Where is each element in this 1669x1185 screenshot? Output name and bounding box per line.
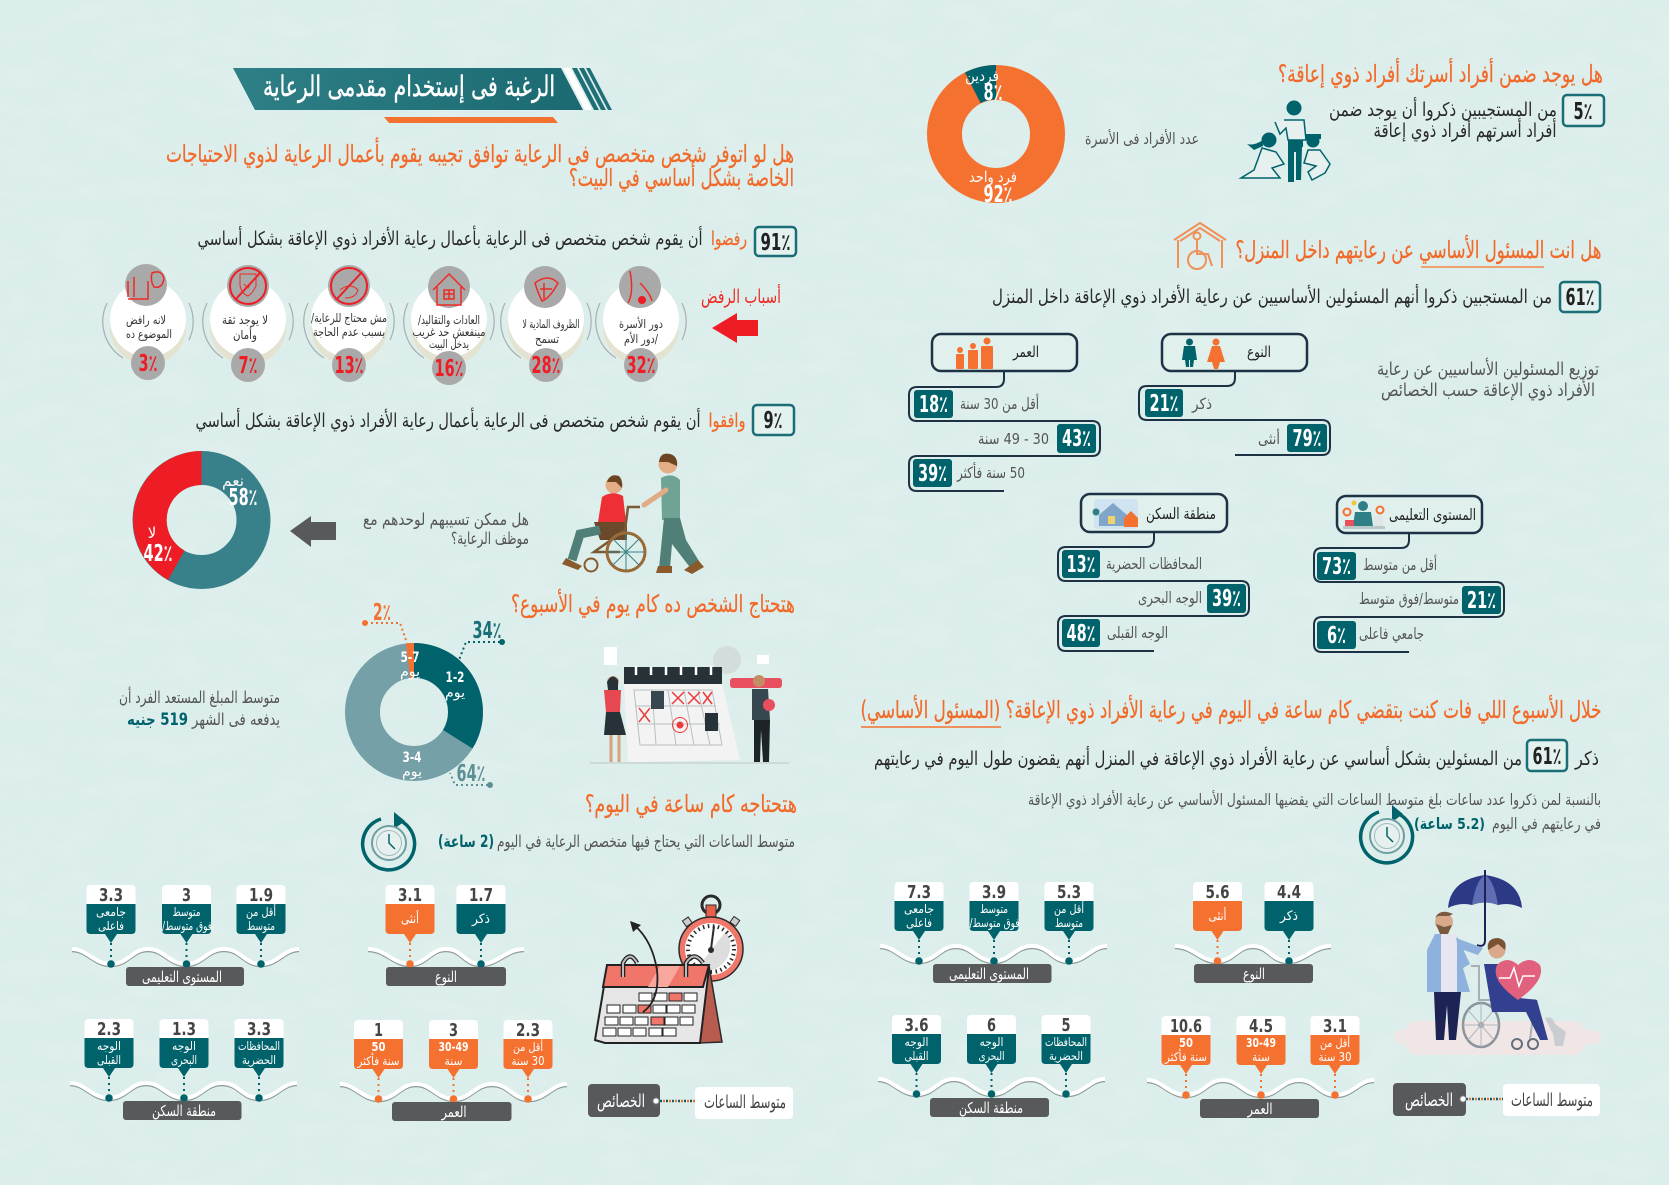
chart: age hours left: سنة فأكثر — [357, 1052, 400, 1069]
donut chart: family members — [944, 65, 1048, 208]
breakdown: region: 48٪ — [1066, 621, 1096, 647]
stat: 61 percent: 61٪ — [1566, 285, 1594, 311]
text: average hours needed: متوسط الساعات التي يحتاج فيها متخصص الرعاية في اليوم — [497, 832, 795, 852]
chart: gender hours right: ذكر — [1279, 909, 1298, 924]
chart: age hours left: 30-49 — [438, 1040, 468, 1054]
reason 3 percent: لانه رافض — [126, 313, 166, 328]
chart: education hours left: متوسط — [247, 919, 275, 934]
text: monthly amount: يدفعه فى الشهر — [191, 710, 280, 730]
question heading — [166, 137, 794, 192]
illustration: carer with umbrella and wheelchair — [1394, 870, 1601, 1055]
chart: age hours right: العمر — [1247, 1100, 1272, 1118]
breakdown: education: متوسط/فوق متوسط — [1359, 590, 1459, 608]
chart: region hours left: 2.3 — [97, 1019, 121, 1040]
reason 7 percent — [203, 265, 293, 382]
chart: education hours right: متوسط — [1055, 916, 1083, 931]
heading: hours per day: هتحتاجه كام ساعة في اليوم؟ — [585, 790, 797, 818]
breakdown: region: 39٪ — [1212, 586, 1241, 612]
text: can they be left alone — [363, 510, 529, 549]
text: average hours needed — [438, 832, 795, 852]
text: average hours primary carer — [1028, 790, 1601, 834]
chart: age hours right: سنة فأكثر — [1164, 1048, 1207, 1065]
chart: region hours right: منطقة السكن — [959, 1099, 1023, 1117]
label: family size: عدد الأفراد فى الأسرة — [1085, 129, 1199, 148]
chart: region hours left: منطقة السكن — [152, 1102, 216, 1120]
arrow: red — [712, 313, 758, 343]
chart: region hours left: البحرى — [171, 1053, 197, 1068]
donut chart: family members: 8٪ — [984, 80, 1002, 106]
stat: refused 91 percent: 91٪ — [760, 230, 790, 256]
reason 16 percent: يدخل البيت — [429, 337, 469, 351]
chart: age hours left: 3 — [449, 1020, 458, 1041]
donut chart: days: 1-2 — [446, 670, 464, 686]
reason 16 percent: العادات والتقاليد/ — [418, 313, 480, 328]
breakdown: education — [1314, 496, 1504, 652]
arrow: gray — [290, 516, 336, 547]
donut chart: yes no: لا — [148, 524, 156, 542]
reason 13 percent: 13٪ — [334, 353, 364, 379]
donut chart: days: يوم — [400, 664, 420, 680]
illustration: man pushing wheelchair — [562, 454, 704, 574]
icon: age figures — [956, 338, 993, 369]
chart: region hours right: 3.6 — [904, 1015, 928, 1036]
chart: education hours right: جامعى — [904, 902, 934, 916]
chart: education hours left: متوسط — [172, 905, 200, 920]
chart: region hours left: الوجه — [172, 1039, 196, 1054]
chart: region hours right: المحافظات — [1045, 1035, 1087, 1049]
chart: education hours right: متوسط — [980, 902, 1008, 917]
chart: age hours left: 30 سنة — [512, 1054, 544, 1068]
breakdown: region — [1058, 494, 1249, 651]
icon: houses — [1092, 499, 1138, 529]
reason 28 percent: تسمح — [535, 332, 559, 346]
breakdown: region: الوجه البحرى — [1138, 589, 1202, 607]
chart: region hours left: 1.3 — [172, 1019, 196, 1040]
chart: education hours left: 3 — [182, 885, 191, 906]
title banner: الرغبة فى إستخدام مقدمى الرعاية — [263, 70, 555, 103]
chart: gender hours right — [1175, 882, 1331, 983]
breakdown: region: 13٪ — [1066, 552, 1096, 578]
chart: region hours left: 3.3 — [247, 1019, 271, 1040]
stat: 5 percent — [1329, 95, 1604, 143]
illustration: calendar with people — [590, 646, 789, 763]
chart: age hours right — [1147, 1016, 1374, 1118]
chart: age hours left: 2.3 — [516, 1020, 540, 1041]
chart: education hours left: جامعى — [96, 905, 126, 919]
donut chart: yes no: نعم — [222, 472, 244, 490]
chart: age hours right: 50 — [1179, 1036, 1193, 1050]
chart: education hours left: 3.3 — [99, 885, 123, 906]
donut chart: days: 5-7 — [400, 650, 420, 666]
donut chart: days — [362, 643, 483, 780]
heading: days per week: هتحتاج الشخص ده كام يوم في الأسبوع؟ — [511, 589, 795, 618]
chart: education hours right: فوق متوسط/ — [970, 916, 1020, 931]
breakdown: education: جامعي فاعلى — [1359, 625, 1424, 644]
breakdown: gender — [1139, 334, 1330, 455]
chart: education hours right: 5.3 — [1057, 882, 1081, 903]
reason 32 percent — [596, 266, 686, 382]
icon: clock — [1361, 805, 1413, 863]
donut chart: days: يوم — [445, 685, 465, 701]
chart: region hours left — [70, 1019, 297, 1120]
breakdown: age: العمر — [1012, 343, 1039, 361]
reason 7 percent: لا يوجد ثقة — [222, 313, 268, 328]
breakdown: region: الوجه القبلى — [1107, 624, 1168, 642]
reason 32 percent: دور الأسرة — [619, 316, 663, 332]
label: reasons for refusal: أسباب الرفض — [701, 284, 781, 308]
chart: education hours right: 7.3 — [907, 882, 931, 903]
chart: region hours left: الوجه — [97, 1039, 121, 1054]
chart: region hours left: الحضرية — [242, 1053, 276, 1068]
text: monthly amount — [119, 686, 280, 730]
reason 3 percent — [103, 264, 193, 380]
chart: age hours right: 30-49 — [1246, 1036, 1276, 1050]
breakdown: region: منطقة السكن — [1146, 505, 1216, 523]
reason 28 percent: الظروف المادية لا — [522, 317, 580, 332]
breakdown: age — [909, 334, 1100, 491]
chart: education hours right: أقل من — [1054, 901, 1084, 917]
breakdown: gender: ذكر — [1191, 395, 1212, 413]
chart: age hours right: 30 سنة — [1318, 1050, 1352, 1064]
breakdown: age: 18٪ — [919, 392, 948, 418]
stat: refused 91 percent: رفضوا — [711, 228, 747, 250]
breakdown: age: 50 سنة فأكثر — [956, 462, 1025, 482]
legend right: الخصائص — [1405, 1090, 1453, 1111]
chart: gender hours left: 3.1 — [398, 885, 422, 906]
reason 13 percent: مش محتاج للرعاية/ — [311, 311, 387, 326]
decorative orange bar under title — [384, 117, 558, 123]
chart: region hours right: البحرى — [978, 1049, 1004, 1064]
icon: graduate with books — [1343, 500, 1385, 529]
reason 7 percent: 7٪ — [238, 353, 258, 379]
chart: education hours left: المستوى التعليمى — [142, 968, 222, 986]
reason 32 percent: /دور الأم — [624, 331, 659, 347]
reason 28 percent — [501, 266, 591, 382]
icon: home wheelchair — [1174, 223, 1226, 269]
chart: age hours left: 50 — [372, 1040, 386, 1054]
stat: agreed 9 percent: أن يقوم شخص متخصص فى الرعاية بأعمال رعاية الأفراد ذوي الإعاقة بشكل أساسي — [196, 407, 700, 432]
chart: age hours right: سنة — [1252, 1050, 1270, 1064]
breakdown: gender: 21٪ — [1150, 391, 1178, 417]
chart: age hours left — [340, 1020, 567, 1121]
donut chart: yes no: 42٪ — [144, 541, 172, 567]
chart: region hours right: الحضرية — [1049, 1049, 1083, 1064]
stat: 5 percent: 5٪ — [1574, 99, 1592, 125]
callout 2 percent: 2٪ — [373, 600, 391, 626]
breakdown: education: المستوى التعليمى — [1389, 506, 1476, 524]
callout 34 percent: 34٪ — [472, 618, 502, 644]
question heading: الخاصة بشكل أساسي في البيت؟ — [569, 162, 794, 192]
breakdown: education: أقل من متوسط — [1363, 554, 1437, 574]
reason 13 percent: بسبب عدم الحاجة — [313, 325, 385, 339]
chart: age hours left: 1 — [374, 1020, 383, 1041]
callout 64 percent — [450, 761, 493, 788]
stat: 5 percent: أفراد أسرتهم أفراد ذوي إعاقة — [1374, 118, 1556, 143]
breakdown: age: 43٪ — [1062, 426, 1091, 452]
title banner — [233, 68, 612, 110]
donut chart: family members: 92٪ — [984, 182, 1012, 208]
reason 7 percent: وأمان — [233, 327, 257, 343]
chart: age hours left: سنة — [444, 1054, 462, 1068]
callout 2 percent — [362, 600, 407, 643]
text: average hours needed: (2 ساعة) — [438, 832, 494, 851]
chart: education hours right: المستوى التعليمى — [949, 965, 1029, 983]
chart: age hours left: أقل من — [513, 1039, 543, 1055]
illustration: calendar and stopwatch — [595, 896, 743, 1043]
text: distribution: توزيع المسئولين الأساسيين عن رعاية — [1377, 358, 1599, 380]
chart: region hours right: الوجه — [980, 1035, 1004, 1050]
text: monthly amount: 519 جنيه — [127, 710, 188, 729]
chart: region hours right — [878, 1015, 1105, 1117]
donut chart: yes no — [133, 451, 258, 580]
chart: education hours right: فاعلى — [906, 916, 932, 930]
chart: age hours right: 3.1 — [1323, 1016, 1347, 1037]
stat: 61 percent — [992, 282, 1600, 312]
reason 16 percent — [404, 266, 494, 385]
illustration: children — [1241, 100, 1330, 182]
chart: education hours right — [880, 882, 1107, 983]
reason 28 percent: 28٪ — [532, 353, 560, 379]
chart: age hours right: 10.6 — [1170, 1016, 1202, 1037]
text: can they be left alone: هل ممكن تسيبهم لوحدهم مع — [363, 510, 529, 530]
reason 16 percent: مينفعش حد غريب — [412, 325, 486, 340]
chart: age hours right: أقل من — [1320, 1035, 1350, 1051]
text: average hours primary carer: في رعايتهم في اليوم — [1492, 815, 1601, 834]
stat: 61 percent all day: 61٪ — [1532, 744, 1562, 770]
legend right — [1393, 1083, 1600, 1116]
stat: refused 91 percent: أن يقوم شخص متخصص فى الرعاية بأعمال رعاية الأفراد ذوي الإعاقة بشكل أساسي — [198, 225, 702, 250]
legend left: الخصائص — [597, 1091, 645, 1112]
chart: gender hours left: 1.7 — [469, 885, 493, 906]
icon: man and woman — [1182, 338, 1225, 369]
chart: region hours left: المحافظات — [238, 1039, 280, 1053]
chart: region hours right: القبلى — [904, 1049, 928, 1063]
text: distribution — [1377, 358, 1599, 401]
reason 32 percent: 32٪ — [626, 353, 656, 379]
question heading: هل لو اتوفر شخص متخصص فى الرعاية توافق تجيبه يقوم بأعمال الرعاية لذوي الاحتياجات — [166, 137, 794, 168]
stat: 61 percent all day — [874, 740, 1599, 771]
callout 34 percent — [459, 618, 505, 660]
breakdown: age: 39٪ — [918, 461, 947, 487]
donut chart: family members: فرد واحد — [969, 168, 1017, 186]
icon: clock — [363, 812, 415, 870]
breakdown: gender: 79٪ — [1292, 426, 1322, 452]
chart: education hours left: فوق متوسط/ — [162, 919, 212, 934]
chart: gender hours right: النوع — [1243, 965, 1265, 983]
breakdown: education: 21٪ — [1467, 588, 1496, 614]
donut chart: days: 3-4 — [402, 750, 422, 766]
text: average hours primary carer: (5.2 ساعة) — [1414, 815, 1485, 833]
reason 3 percent: الموضوع ده — [126, 327, 172, 342]
legend left: متوسط الساعات — [704, 1092, 786, 1113]
chart: education hours left — [72, 885, 299, 986]
reason 16 percent: 16٪ — [434, 356, 464, 382]
panel: reasons — [103, 264, 686, 385]
chart: age hours left: العمر — [441, 1103, 466, 1121]
chart: gender hours left: أنثى — [401, 910, 419, 927]
donut chart: days: يوم — [402, 764, 422, 780]
reason 3 percent: 3٪ — [138, 351, 158, 377]
breakdown: age: 30 - 49 سنة — [978, 430, 1049, 448]
breakdown: gender: النوع — [1247, 343, 1271, 361]
stat: refused 91 percent — [198, 225, 796, 256]
text: can they be left alone: موظف الرعاية؟ — [451, 529, 529, 549]
stat: agreed 9 percent — [196, 405, 794, 435]
breakdown: education: 6٪ — [1327, 623, 1346, 649]
callout 64 percent: 64٪ — [456, 761, 486, 787]
chart: education hours left: فاعلى — [98, 919, 124, 933]
chart: gender hours right: 4.4 — [1277, 882, 1301, 903]
text: monthly amount: متوسط المبلغ المستعد الفرد أن — [119, 686, 280, 708]
stat: 5 percent: من المستجيبين ذكروا أن يوجد ضمن — [1329, 97, 1557, 121]
donut chart: yes no: 58٪ — [228, 485, 258, 511]
donut chart: family members: فردين — [965, 67, 999, 85]
breakdown: region: المحافظات الحضرية — [1106, 555, 1202, 573]
text: distribution: الأفراد ذوي الإعاقة حسب الخصائص — [1381, 379, 1595, 401]
chart: education hours right: 3.9 — [982, 882, 1006, 903]
chart: age hours right: 4.5 — [1249, 1016, 1273, 1037]
reason 13 percent — [304, 265, 394, 382]
chart: gender hours right: أنثى — [1208, 907, 1226, 924]
chart: region hours right: 5 — [1062, 1015, 1070, 1036]
breakdown: gender: أنثى — [1258, 428, 1280, 448]
stat: agreed 9 percent: وافقوا — [708, 410, 746, 432]
stat: agreed 9 percent: 9٪ — [764, 408, 782, 434]
chart: gender hours right: 5.6 — [1206, 882, 1230, 903]
chart: gender hours left: ذكر — [471, 912, 490, 927]
chart: gender hours left — [368, 885, 524, 986]
legend left — [588, 1084, 793, 1119]
chart: gender hours left: النوع — [435, 968, 457, 986]
breakdown: age: أقل من 30 سنة — [960, 393, 1039, 413]
stat: 61 percent all day: ذكر — [1574, 748, 1599, 770]
chart: region hours left: القبلى — [97, 1053, 121, 1067]
chart: region hours right: الوجه — [904, 1035, 928, 1050]
chart: education hours left: 1.9 — [249, 885, 273, 906]
chart: region hours right: 6 — [987, 1015, 996, 1036]
breakdown: education: 73٪ — [1322, 554, 1351, 580]
chart: education hours left: أقل من — [246, 904, 276, 920]
legend right: متوسط الساعات — [1511, 1090, 1593, 1111]
